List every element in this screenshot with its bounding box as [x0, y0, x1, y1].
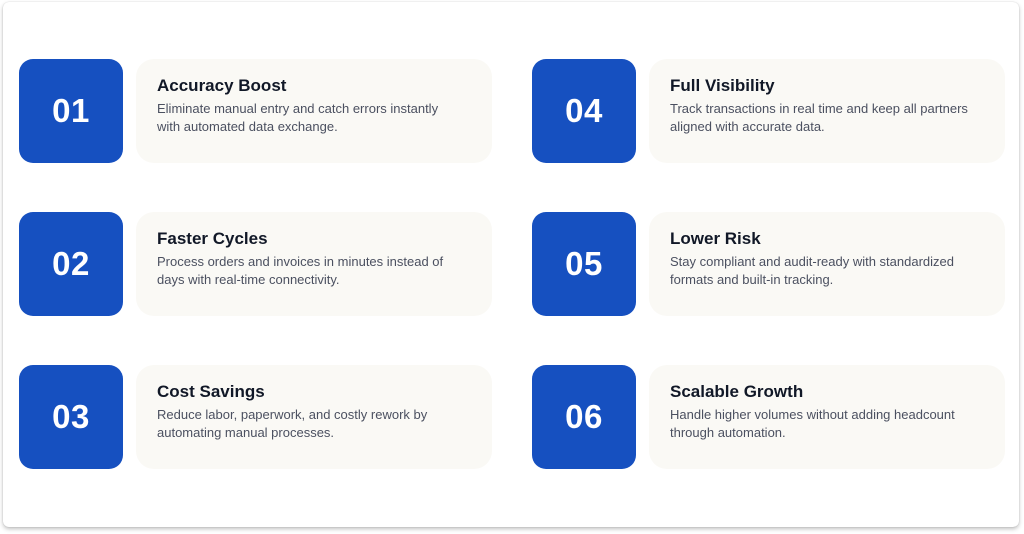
- card: Full Visibility: Track transactions in real time and keep all partners aligned with accurate data.: [670, 101, 968, 134]
- card: Cost Savings: Reduce labor, paperwork, and costly rework by automating manual processes.: [157, 407, 427, 440]
- card: Scalable Growth: Handle higher volumes without adding headcount through automation.: [670, 407, 955, 440]
- card: Full Visibility: [649, 59, 1005, 163]
- number: 02: [19, 212, 123, 316]
- card: Scalable Growth: [649, 365, 1005, 469]
- number: 04: [532, 59, 636, 163]
- number: 03: 03: [52, 398, 90, 435]
- number: 04: 04: [565, 92, 603, 129]
- card: Faster Cycles: Process orders and invoices in minutes instead of days with real-time connectivity.: [157, 254, 443, 287]
- number: 06: 06: [565, 398, 603, 435]
- card: Faster Cycles: Faster Cycles: [157, 229, 268, 248]
- number: 05: 05: [565, 245, 603, 282]
- number: 03: [19, 365, 123, 469]
- card: Full Visibility: Full Visibility: [670, 76, 775, 95]
- number: 01: [19, 59, 123, 163]
- number: 01: 01: [52, 92, 90, 129]
- card: Accuracy Boost: Eliminate manual entry and catch errors instantly with automated data exchange.: [157, 101, 438, 134]
- card: Lower Risk: [649, 212, 1005, 316]
- card: Lower Risk: Stay compliant and audit-ready with standardized formats and built-in tracking.: [670, 254, 954, 287]
- card: Cost Savings: Cost Savings: [157, 382, 265, 401]
- number: 02: 02: [52, 245, 90, 282]
- card: Cost Savings: [136, 365, 492, 469]
- card: Accuracy Boost: [136, 59, 492, 163]
- number: 06: [532, 365, 636, 469]
- card: Faster Cycles: [136, 212, 492, 316]
- card: Accuracy Boost: Accuracy Boost: [157, 76, 286, 95]
- card: Lower Risk: Lower Risk: [670, 229, 761, 248]
- number: 05: [532, 212, 636, 316]
- card: Scalable Growth: Scalable Growth: [670, 382, 803, 401]
